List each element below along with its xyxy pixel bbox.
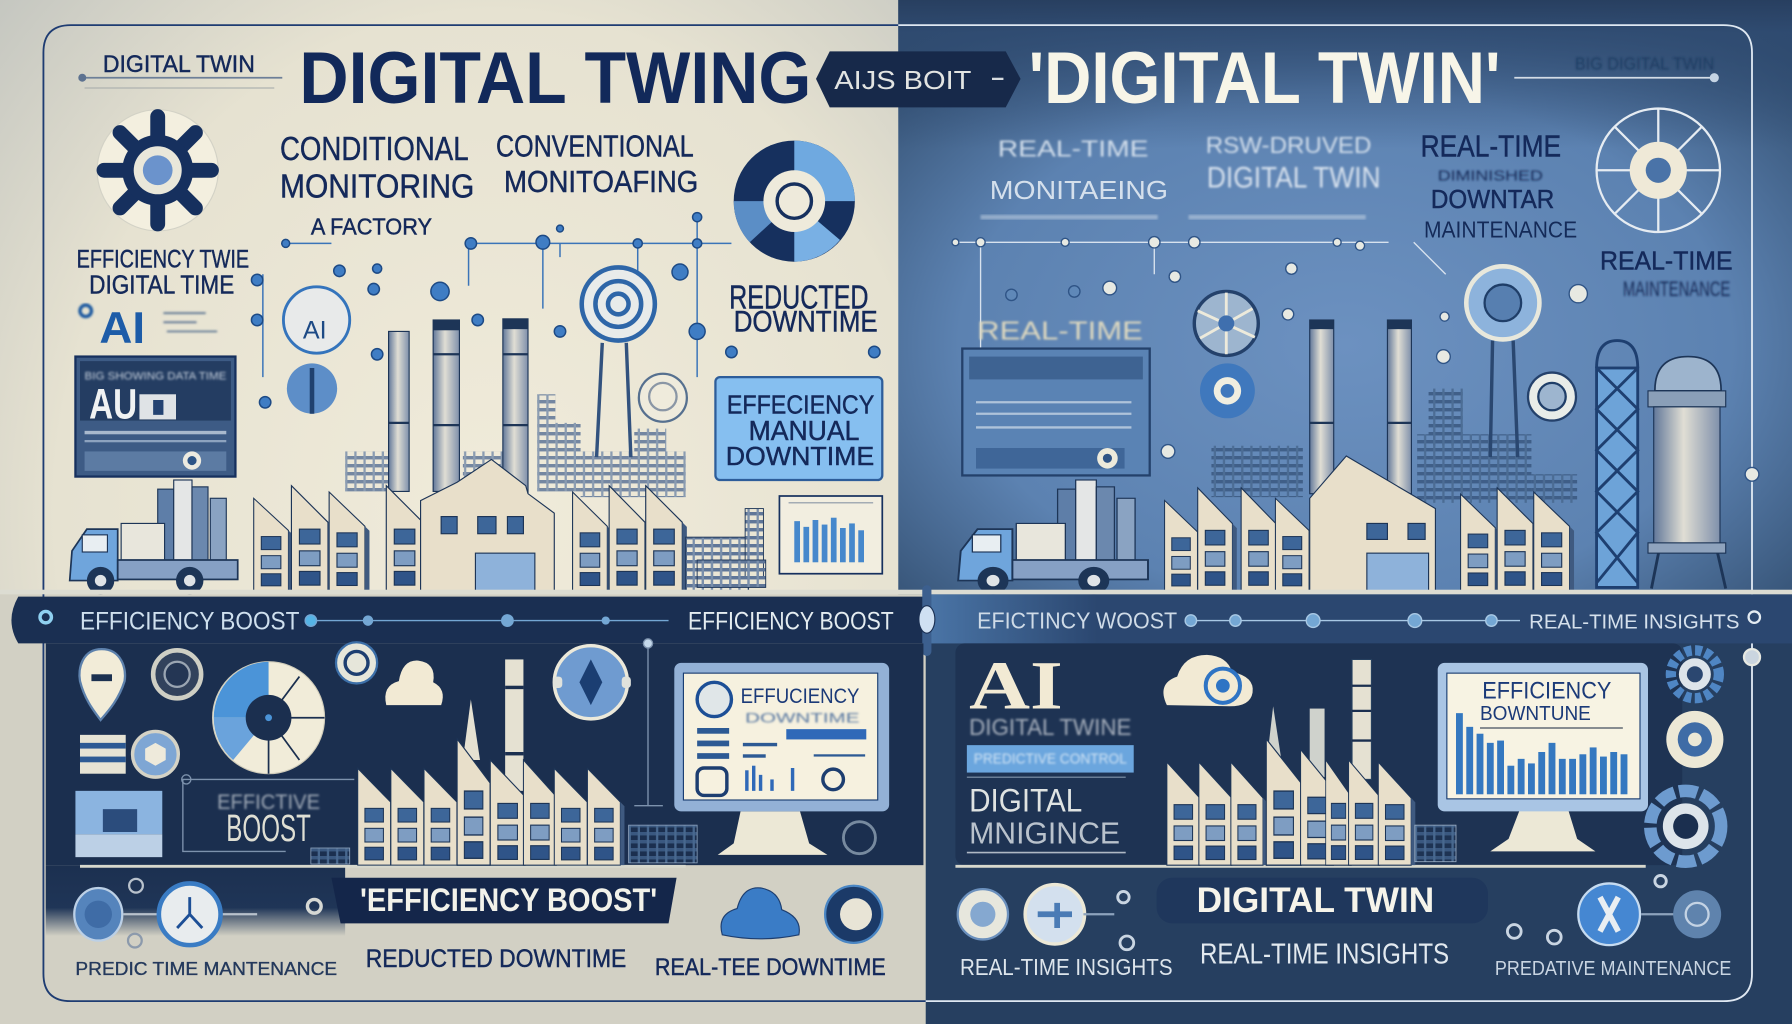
small rings bottom right bbox=[1118, 875, 1666, 950]
icon: cloud left bbox=[385, 661, 443, 705]
chimney lower right bbox=[1266, 659, 1371, 779]
storage tank bbox=[1648, 357, 1726, 589]
icon: blue badge lower left bbox=[74, 888, 122, 941]
network diagram right bbox=[952, 237, 1759, 481]
text: right real-time downtime maintenance: DIMINISHED bbox=[1438, 169, 1543, 185]
blue bar bbox=[967, 745, 1134, 773]
panel: right screen bbox=[962, 349, 1150, 475]
center pill: AIJS BOIT bbox=[834, 65, 971, 95]
center pill bbox=[816, 51, 1021, 107]
background: lower left cream bbox=[0, 594, 926, 1024]
chimneys right bbox=[1310, 320, 1411, 494]
text: digital mnigince: MNIGINCE bbox=[969, 815, 1120, 850]
icon: AI circle: AI bbox=[303, 316, 327, 344]
frame: left bbox=[43, 25, 926, 1001]
right side marker bbox=[1744, 649, 1760, 665]
title right: 'DIGITAL TWIN' bbox=[1029, 38, 1501, 119]
text: real-time cream: REAL-TIME bbox=[977, 315, 1143, 345]
AI serif letters: AI bbox=[969, 648, 1063, 724]
text: efficiency digital time bbox=[77, 245, 249, 300]
background: right top shade bbox=[898, 0, 1792, 149]
skyline right bbox=[1211, 389, 1577, 503]
panel: lower left dark bbox=[46, 643, 923, 865]
machinery lower right bbox=[1415, 825, 1456, 862]
icon: small ring bottom bbox=[307, 899, 321, 913]
text: efficiency boost small: EFFICTIVE bbox=[217, 789, 320, 814]
connector badges bbox=[123, 879, 257, 947]
pill: efficiency boost: 'EFFICIENCY BOOST' bbox=[360, 882, 657, 918]
text: real-time insights left: REAL-TIME INSIGHTS bbox=[960, 954, 1173, 980]
panel: AI screen: BIG SHOWING DATA TIME bbox=[85, 370, 227, 382]
icon: bulb bbox=[79, 649, 125, 720]
monitor lower right: BOWNTUNE bbox=[1480, 702, 1591, 725]
text: conventional monitoring: MONITOAFING bbox=[504, 164, 698, 199]
photo block bbox=[75, 791, 162, 857]
text: conventional monitoring: CONVENTIONAL bbox=[496, 129, 694, 164]
callout: efficiency manual downtime: DOWNTIME bbox=[726, 441, 874, 471]
stripes block bbox=[80, 735, 126, 774]
band label left one: EFFICIENCY BOOST bbox=[80, 608, 299, 636]
icon: compass lower left bbox=[553, 646, 631, 719]
title left: DIGITAL TWING bbox=[299, 38, 811, 119]
band right bbox=[923, 594, 1792, 643]
monitor lower left: DOWNTIME bbox=[745, 710, 859, 725]
text: right driven digital twin: DIGITAL TWIN bbox=[1207, 161, 1381, 194]
text: conditional monitoring: MONITORING bbox=[280, 169, 474, 206]
icon: dial bbox=[213, 662, 325, 774]
text: reducted downtime bottom: REDUCTED DOWNTIME bbox=[366, 945, 626, 973]
skyline left bbox=[345, 394, 686, 497]
chart panel left bbox=[779, 496, 882, 574]
callout: efficiency manual downtime bbox=[715, 377, 882, 480]
text: right driven digital twin bbox=[1206, 132, 1381, 194]
icon: navy gear bbox=[97, 110, 218, 231]
machinery left bbox=[686, 509, 766, 591]
dark fade lower left bbox=[46, 865, 345, 936]
icon: AI circle bbox=[283, 287, 350, 353]
background: left cream half bbox=[0, 0, 898, 1024]
factory lower left bbox=[358, 739, 624, 865]
icon: cloud right bbox=[1163, 655, 1253, 706]
text: right real-time downtime maintenance: MAINTENANCE bbox=[1424, 217, 1577, 243]
text: digital mnigince bbox=[967, 777, 1126, 853]
text: conditional monitoring bbox=[280, 131, 474, 206]
text: digital twine: DIGITAL TWINE bbox=[969, 714, 1131, 740]
small heading right: BIG DIGITAL TWIN bbox=[1575, 54, 1714, 74]
icon: ring bbox=[153, 650, 201, 698]
icon: target bbox=[582, 267, 655, 457]
panel: AI screen bbox=[75, 357, 235, 477]
factory buildings left bbox=[254, 459, 687, 591]
monitor lower left: EFFUCIENCY bbox=[741, 683, 859, 708]
icon: donut gear bbox=[734, 141, 855, 262]
text: digital mnigince: DIGITAL bbox=[969, 782, 1082, 818]
panel: AI screen: AU bbox=[89, 380, 137, 427]
monitor lower right bbox=[1438, 663, 1648, 851]
band connector left bbox=[305, 615, 669, 626]
frame: right bbox=[898, 25, 1752, 1001]
text: right real-time downtime maintenance: DOWNTAR bbox=[1431, 184, 1554, 214]
icon: badge two bbox=[1025, 885, 1085, 944]
text: reducted downtime bbox=[729, 280, 878, 338]
icon: blue disc right bbox=[1200, 363, 1255, 418]
icon: badges lower right bbox=[958, 889, 1008, 939]
panel: lower right dark bbox=[955, 643, 1682, 865]
icon: blue disc bottom bbox=[825, 886, 882, 943]
text: efficiency digital time: DIGITAL TIME bbox=[89, 270, 234, 300]
band left bbox=[11, 597, 923, 643]
band label left two: EFFICIENCY BOOST bbox=[688, 608, 894, 636]
text: right real-time downtime maintenance bbox=[1421, 129, 1577, 243]
text: conditional monitoring: CONDITIONAL bbox=[280, 131, 469, 168]
icon: circle badge bbox=[336, 642, 377, 683]
text: real-time insights center: REAL-TIME INSIGHTS bbox=[1200, 938, 1449, 970]
band connector right bbox=[1185, 611, 1760, 627]
truck right bbox=[958, 480, 1148, 594]
text: right driven digital twin: RSW-DRUVED bbox=[1206, 132, 1371, 158]
machinery lower left bbox=[311, 825, 697, 864]
text: efficiency boost small bbox=[217, 789, 320, 849]
icon: small glyph bbox=[843, 822, 875, 854]
background: right blue half bbox=[898, 0, 1792, 594]
icon: hex circle bbox=[133, 731, 178, 777]
pill: digital twin: DIGITAL TWIN bbox=[1197, 880, 1434, 920]
icon: small ring bbox=[639, 374, 687, 422]
text: efficiency digital time: EFFICIENCY TWIE bbox=[77, 245, 249, 273]
chimney lower left bbox=[463, 659, 523, 791]
icon: grey badge bbox=[1641, 890, 1721, 938]
blue bar: PREDICTIVE CONTROL bbox=[974, 751, 1127, 767]
chimneys left bbox=[389, 319, 528, 493]
text: right real-time monitoring: REAL-TIME bbox=[998, 136, 1149, 162]
icon: compass wheel top right bbox=[1597, 109, 1720, 232]
AI label: AI bbox=[99, 304, 145, 353]
small heading left bbox=[78, 51, 282, 88]
text: real-time downtime bottom: REAL-TEE DOWNTIME bbox=[655, 954, 886, 981]
text: reducted downtime: REDUCTED bbox=[729, 280, 869, 317]
background: lower right navy bbox=[926, 594, 1792, 1024]
icon: ring right bbox=[1528, 373, 1576, 421]
connector lower left bbox=[182, 639, 663, 851]
text: conventional monitoring bbox=[496, 129, 698, 199]
small heading left: DIGITAL TWIN bbox=[103, 51, 255, 78]
icon: target right bbox=[1466, 266, 1539, 457]
small scribbles bbox=[80, 305, 217, 331]
factory lower right bbox=[1167, 739, 1415, 865]
icon: gear right one bbox=[1671, 650, 1719, 698]
text: real-time maintenance bbox=[1600, 246, 1733, 301]
truck left bbox=[70, 480, 238, 594]
text: efficiency boost small: BOOST bbox=[226, 807, 311, 849]
text: right real-time monitoring: MONITAEING bbox=[990, 175, 1168, 205]
factory buildings right bbox=[1165, 456, 1574, 591]
text: reducted downtime: DOWNTIME bbox=[734, 305, 878, 338]
text: real-time maintenance: REAL-TIME bbox=[1600, 246, 1733, 276]
divider lines bbox=[80, 865, 1646, 868]
text: real-time maintenance: MAINTENANCE bbox=[1623, 276, 1730, 301]
center node bbox=[919, 585, 935, 656]
icon: gear right two bbox=[1666, 711, 1723, 768]
monitor lower left bbox=[674, 663, 889, 855]
icon: compass badge bbox=[159, 883, 221, 945]
lattice tower bbox=[1597, 341, 1638, 587]
callout: efficiency manual downtime: MANUAL bbox=[749, 415, 859, 446]
band label right one: EFICTINCY WOOST bbox=[977, 608, 1177, 634]
small heading right bbox=[1514, 54, 1719, 82]
icon: blue x badge bbox=[1578, 883, 1640, 945]
text: right real-time downtime maintenance: REAL-TIME bbox=[1421, 129, 1561, 164]
band label right two: REAL-TIME INSIGHTS bbox=[1529, 611, 1739, 634]
icon: wheel right bbox=[1194, 291, 1258, 355]
text: predative maintenance: PREDATIVE MAINTENANCE bbox=[1495, 957, 1731, 980]
dim caption row bbox=[981, 215, 1366, 219]
callout: efficiency manual downtime: EFFECIENCY bbox=[727, 390, 874, 420]
network diagram left bbox=[251, 213, 880, 408]
separator bbox=[0, 590, 1792, 594]
pill: digital twin bbox=[1157, 878, 1488, 923]
icon: blue cloud bbox=[721, 888, 799, 939]
text: a factory: A FACTORY bbox=[311, 213, 432, 239]
icon: blue circle bbox=[287, 363, 337, 414]
text: predictive maintenance: PREDIC TIME MANTENANCE bbox=[75, 958, 337, 979]
monitor lower right: EFFICIENCY bbox=[1482, 677, 1611, 704]
icon: gear right three bbox=[1650, 791, 1721, 862]
text: right real-time monitoring bbox=[990, 136, 1168, 205]
